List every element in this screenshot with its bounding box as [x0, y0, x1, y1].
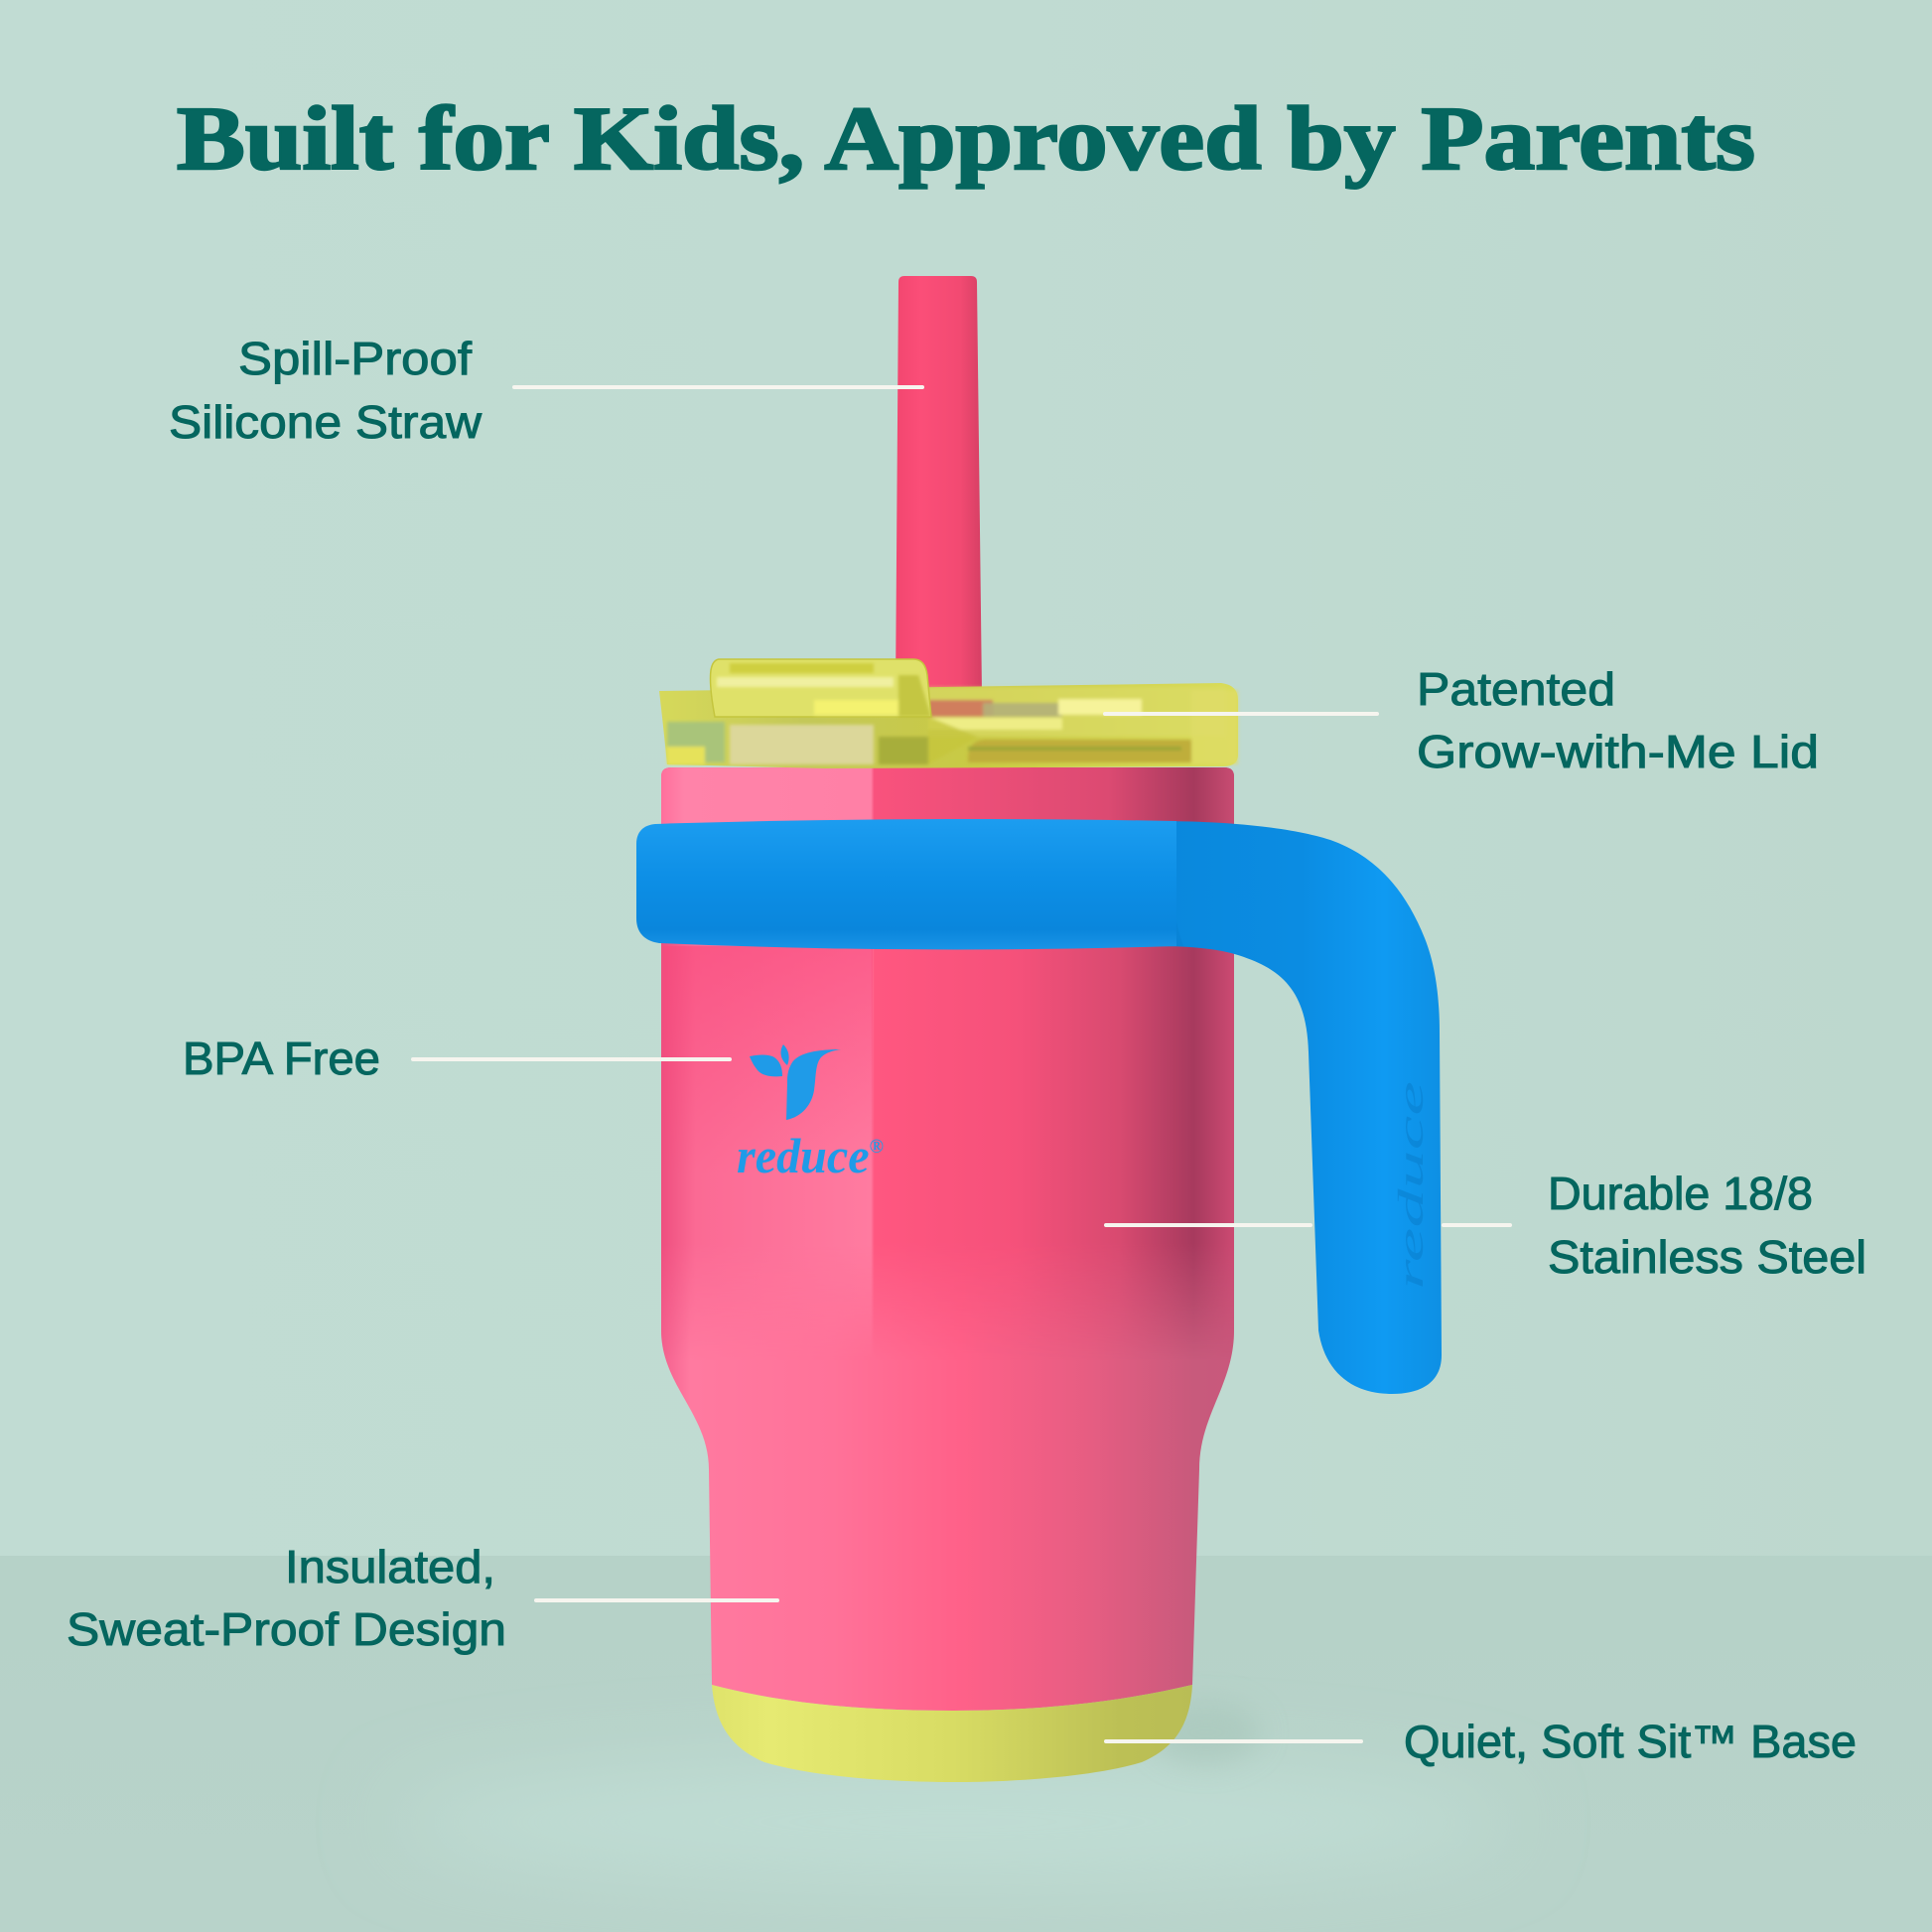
- callout: BPA free: BPA Free: [183, 1033, 380, 1084]
- callout: patented grow-with-me lid: Patented: [1417, 663, 1615, 715]
- callout: BPA free: [183, 1033, 732, 1084]
- line behind handle: stainless steel right segment: [1442, 1223, 1512, 1227]
- callout: spill-proof silicone straw: [169, 333, 924, 448]
- straw: [896, 276, 982, 695]
- base: [712, 1685, 1192, 1782]
- logo wordmark: ®: [870, 1136, 884, 1158]
- callout: durable stainless steel: Stainless Steel: [1548, 1231, 1866, 1283]
- callout: patented grow-with-me lid: Grow-with-Me Lid: [1417, 726, 1819, 777]
- tumbler illustration: [636, 276, 1512, 1782]
- callout: durable stainless steel: [1104, 1168, 1866, 1283]
- callout: insulated sweat-proof design: Sweat-Proof Design: [67, 1603, 506, 1655]
- logo wordmark: reduce: [737, 1128, 875, 1183]
- title: Built for Kids, Approved by Parents: [177, 88, 1755, 189]
- handle embossed brand: reduce: [1391, 1081, 1431, 1290]
- callout: insulated sweat-proof design: Insulated,: [285, 1541, 495, 1592]
- tumbler handle: [1157, 821, 1442, 1394]
- tumbler body: [655, 767, 1241, 1711]
- callout: quiet soft sit base: [1104, 1716, 1857, 1767]
- callout: spill-proof silicone straw: Silicone Straw: [169, 396, 483, 448]
- background floor: [0, 1556, 1932, 1932]
- logo mark: [750, 1044, 841, 1120]
- callout: quiet soft sit base: Quiet, Soft Sit™ Base: [1404, 1716, 1857, 1767]
- callout: spill-proof silicone straw: Spill-Proof: [238, 333, 472, 384]
- lid main body: [659, 683, 1238, 768]
- silicone grip band: [636, 819, 1176, 949]
- callout: patented grow-with-me lid: [1103, 663, 1819, 777]
- lid flip tab: [711, 659, 931, 717]
- callout: insulated sweat-proof design: [67, 1541, 779, 1655]
- reduce logo: [737, 1044, 884, 1183]
- callout: durable stainless steel: Durable 18/8: [1548, 1168, 1813, 1219]
- lid: [659, 659, 1238, 768]
